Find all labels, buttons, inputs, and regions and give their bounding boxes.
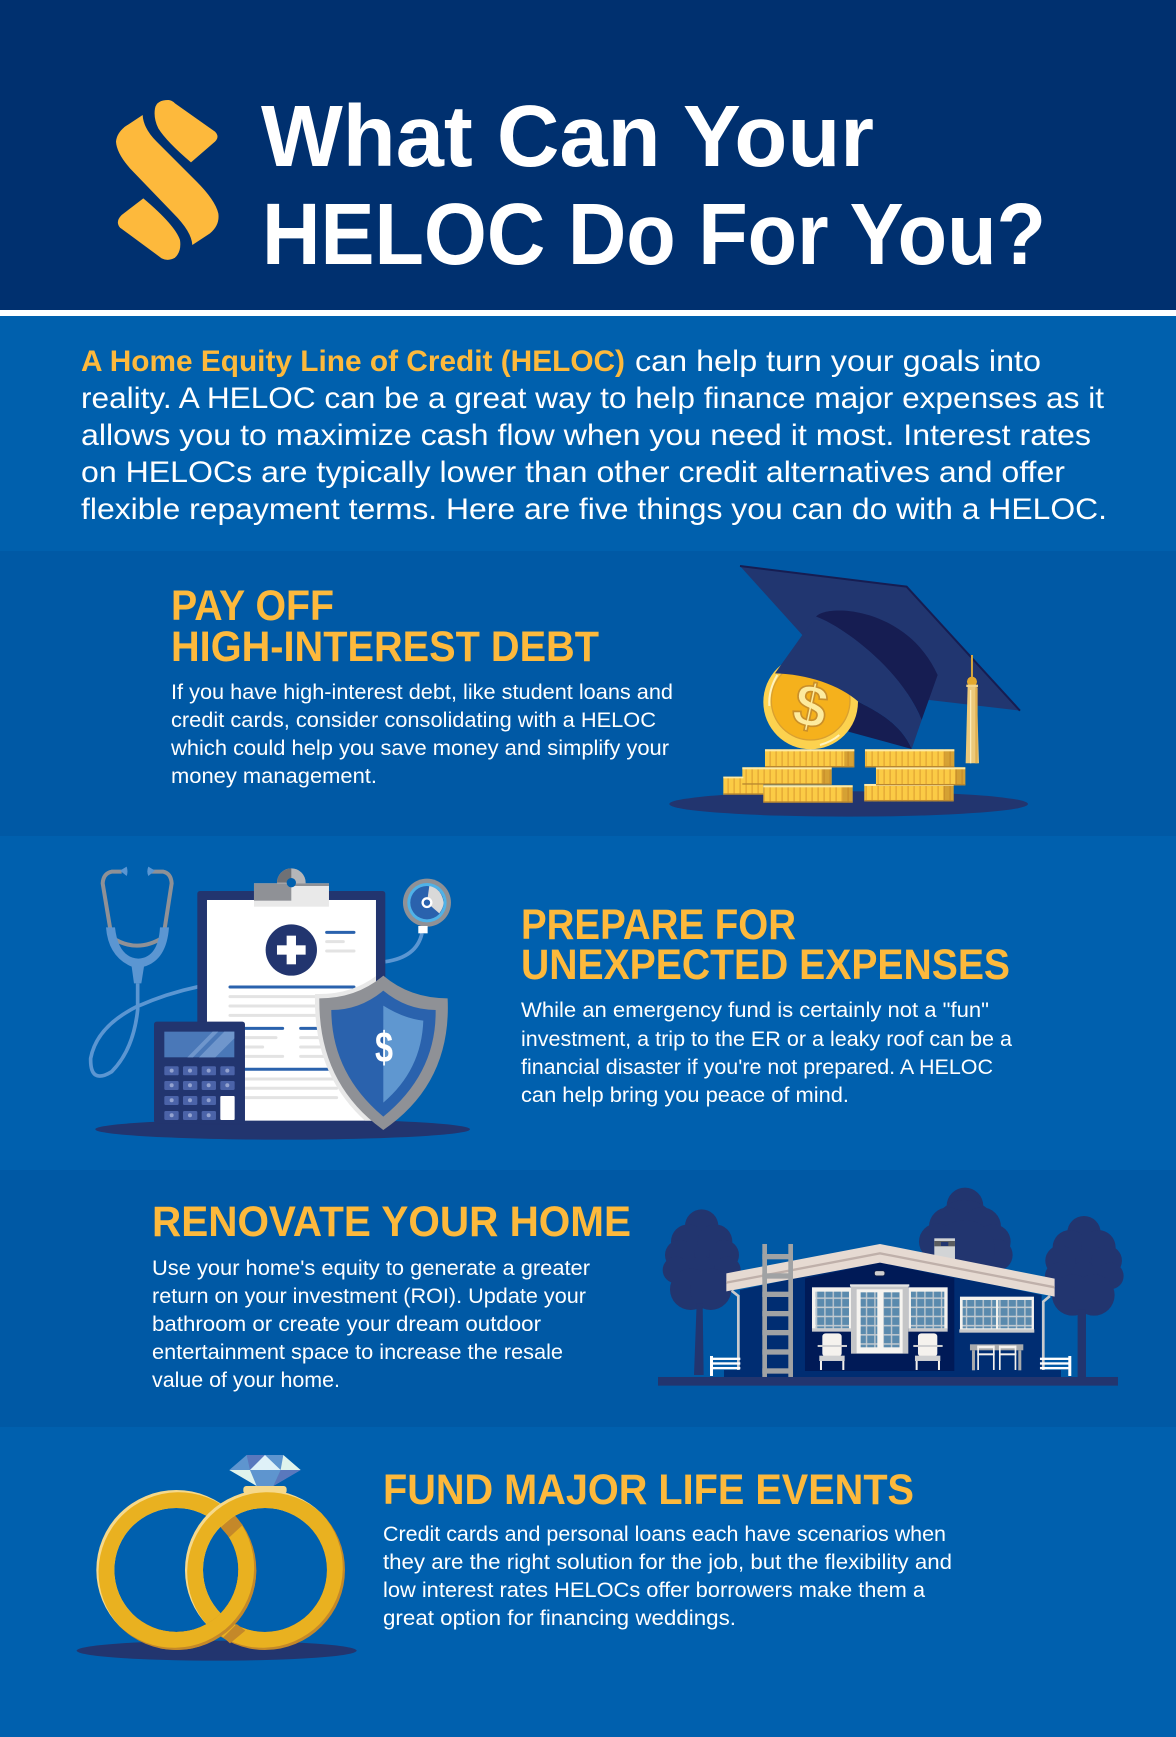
intro text block: A Home Equity Line of Credit (HELOC) — [81, 345, 625, 378]
title: HELOC Do For You? — [262, 186, 1046, 283]
section text: pay off debt: If you have high-interest debt, like student loans and — [171, 680, 673, 704]
panel: unexpected expenses band — [0, 836, 1176, 1170]
intro text block: allows you to maximize cash flow when you need it most. Interest rates — [81, 419, 1091, 452]
intro text block — [81, 345, 1107, 526]
panel: pay off debt band — [0, 551, 1176, 836]
section text: renovate your home: entertainment space to increase the resale — [152, 1340, 563, 1364]
section text: pay off debt: HIGH-INTEREST DEBT — [171, 623, 599, 671]
section text: fund major life events: they are the right solution for the job, but the flexibility and — [383, 1550, 952, 1574]
divider band — [0, 310, 1176, 316]
intro text block: can help turn your goals into — [635, 345, 1041, 378]
panel: life events band — [0, 1427, 1176, 1737]
section text: unexpected expenses: PREPARE FOR — [521, 901, 796, 949]
illustration: graduation cap and coins — [669, 566, 1028, 817]
illustration: house with ladder and trees — [658, 1188, 1124, 1386]
section text: fund major life events — [383, 1466, 952, 1630]
illustration: wedding rings with diamond — [77, 1455, 357, 1661]
section text: pay off debt: credit cards, consider consolidating with a HELOC — [171, 708, 656, 732]
section text: renovate your home: return on your investment (ROI). Update your — [152, 1284, 586, 1308]
section text: fund major life events: Credit cards and personal loans each have scenarios when — [383, 1522, 946, 1546]
title: What Can Your — [261, 88, 874, 185]
section text: fund major life events: great option for financing weddings. — [383, 1606, 736, 1630]
section text: unexpected expenses: investment, a trip to the ER or a leaky roof can be a — [521, 1027, 1012, 1051]
intro text block: on HELOCs are typically lower than other credit alternatives and offer — [81, 456, 1065, 489]
section text: pay off debt: PAY OFF — [171, 582, 334, 630]
section text: unexpected expenses: UNEXPECTED EXPENSES — [521, 941, 1010, 989]
section text: unexpected expenses: While an emergency fund is certainly not a "fun" — [521, 998, 989, 1022]
illustration: medical clipboard, stethoscope, calculator and shield — [91, 867, 470, 1140]
intro text block: reality. A HELOC can be a great way to help finance major expenses as it — [81, 382, 1105, 415]
section text: pay off debt: which could help you save money and simplify your — [170, 736, 669, 760]
section text: unexpected expenses: can help bring you peace of mind. — [521, 1083, 849, 1107]
section text: renovate your home: value of your home. — [152, 1368, 340, 1392]
section text: renovate your home: Use your home's equity to generate a greater — [152, 1256, 590, 1280]
section text: pay off debt: money management. — [171, 764, 377, 788]
section text: fund major life events: FUND MAJOR LIFE EVENTS — [383, 1466, 914, 1514]
section text: fund major life events: low interest rates HELOCs offer borrowers make them a — [383, 1578, 925, 1602]
title — [261, 88, 1046, 283]
panel: intro band — [0, 316, 1176, 551]
section text: renovate your home — [152, 1198, 631, 1392]
panel: renovate band — [0, 1170, 1176, 1427]
panel: header band — [0, 0, 1176, 310]
section text: unexpected expenses: financial disaster if you're not prepared. A HELOC — [521, 1055, 993, 1079]
illustration: graduation cap and coins: $ — [787, 670, 834, 742]
intro text block: flexible repayment terms. Here are five things you can do with a HELOC. — [81, 493, 1107, 526]
section text: unexpected expenses — [521, 901, 1012, 1107]
section text: pay off debt — [170, 582, 673, 788]
section text: renovate your home: bathroom or create your dream outdoor — [152, 1312, 541, 1336]
section text: renovate your home: RENOVATE YOUR HOME — [152, 1198, 631, 1246]
icon: logo — [116, 100, 219, 260]
illustration: medical clipboard, stethoscope, calculator and shield: $ — [375, 1025, 393, 1073]
